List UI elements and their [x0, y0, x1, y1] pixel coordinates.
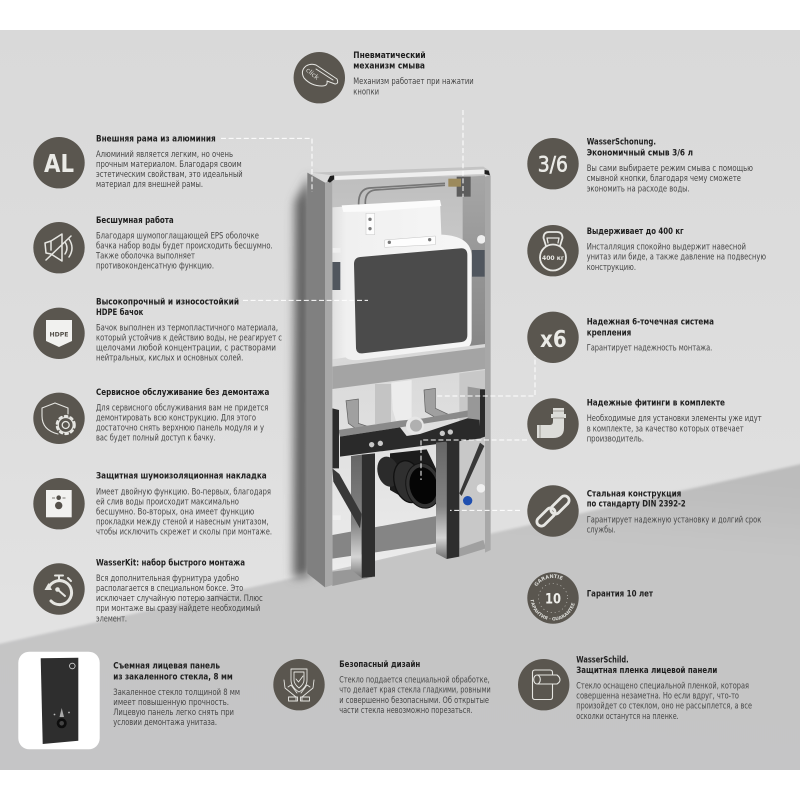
text block: Лицевую панель легко снять при: [113, 708, 234, 718]
heading: крепления: [587, 328, 631, 338]
heading: Бесшумная работа: [96, 215, 174, 226]
left leg black: [362, 453, 375, 578]
text block: осколки останутся на пленке.: [576, 712, 679, 722]
heading: [113, 662, 233, 682]
text block: [587, 243, 766, 273]
text block: [353, 77, 474, 97]
heading: Защитная шумоизоляционная накладка: [96, 471, 267, 481]
icon: HDPE shield: [33, 308, 85, 359]
icon: muted speaker: [33, 222, 85, 273]
shelf top lip: [332, 344, 485, 367]
top cap: [311, 167, 491, 181]
icon: x6: [527, 312, 579, 363]
text block: Имеет двойную функцию. Во-первых, благодаря: [96, 487, 271, 497]
left rail front: [325, 181, 332, 587]
left diagonal brace: [332, 468, 362, 528]
pipes: [359, 183, 445, 205]
back wall of frame: [332, 175, 485, 570]
text block: конструкцию.: [587, 263, 636, 273]
elbow flange: [406, 417, 424, 435]
heading: Высокопрочный и износостойкий: [96, 297, 239, 307]
icon: pad: [33, 478, 85, 529]
text block: [96, 403, 268, 444]
right post: [468, 387, 485, 438]
text block: Вся дополнительная фурнитура удобно: [96, 574, 239, 584]
heading: [587, 489, 686, 510]
text block: [95, 231, 273, 272]
text block: бачка набор воды будет происходить бесшумно.: [96, 241, 273, 251]
icon: AL: [33, 137, 85, 188]
panel: pneumatic flush: [294, 51, 474, 103]
text block: материал для внешней рамы.: [96, 180, 203, 190]
icon: 3/6: 3/6: [538, 152, 568, 176]
side clips: [332, 250, 485, 290]
text block: и совершенно безопасными. Об открытые: [339, 696, 489, 706]
beam bolts: [369, 429, 453, 447]
right leg black: [447, 439, 459, 559]
text block: [339, 676, 491, 716]
text block: достаточно снять верхнюю панель модуля и у: [96, 424, 264, 434]
text block: [587, 164, 753, 194]
black corner left: [327, 175, 334, 183]
text block: прокладки между стеной и навесным унитазом,: [96, 518, 269, 528]
panel: fittings: [527, 398, 762, 450]
brass fitting: [448, 177, 471, 197]
icon: warranty badge: 10: [545, 592, 561, 608]
text block: Инсталляция спокойно выдержит навесной: [587, 243, 746, 253]
text block: располагается в специальном боксе. Это: [96, 584, 243, 594]
heading: WasserSchild.: [576, 655, 629, 665]
icon: chain: [527, 485, 579, 537]
text block: Также оболочка выполняет: [95, 251, 195, 261]
panel: 400 kg load: [527, 225, 766, 276]
text block: имеет повышенную прочность.: [113, 698, 229, 708]
text block: при монтаже вы сразу найдете необходимый: [96, 604, 260, 614]
text block: Вы сами выбираете режим смыва с помощью: [587, 164, 753, 174]
text block: [96, 487, 272, 538]
text block: прочным материалом. Благодаря своим: [96, 160, 242, 170]
top cap highlight: [335, 169, 484, 180]
back shadow of drain pipe: [375, 384, 391, 424]
text block: Стекло поддается специальной обработке,: [339, 676, 490, 686]
panel: six-point fixing: [527, 312, 714, 363]
panel: WasserSchonung: [527, 138, 753, 194]
text block: Благодаря шумопоглащающей EPS оболочке: [96, 231, 259, 241]
heading: [576, 655, 717, 676]
heading: HDPE бачок: [96, 307, 143, 318]
icon: elbow fitting: [527, 398, 579, 450]
left rail side: [307, 173, 325, 587]
drain pipe: [391, 380, 412, 423]
icon: film roll: [518, 659, 569, 710]
blue water connector: [463, 496, 472, 505]
text block: ей слив воды происходит максимально: [96, 497, 239, 507]
panel: aluminium frame: [33, 134, 243, 190]
heading: Экономичный смыв 3/6 л: [587, 148, 693, 158]
text block: чтобы исключить скрежет и сколы при монтаже.: [96, 528, 272, 538]
icon: HDPE shield: HDPE: [50, 330, 68, 338]
panel: removable glass front: [18, 652, 240, 749]
drain socket: [374, 449, 445, 511]
left foot: [332, 569, 375, 586]
icon: AL: AL: [44, 149, 74, 178]
text block: бесшумно. Во-вторых, она имеет функцию: [96, 507, 254, 517]
product card: [18, 652, 100, 749]
heading: Надежные фитинги в комплекте: [587, 399, 725, 409]
frame shadow: [293, 175, 310, 578]
text block: противоконденсатную функцию.: [96, 262, 214, 272]
text block: элемент.: [96, 614, 127, 624]
text block: [587, 414, 762, 444]
icon: x6: x6: [540, 327, 567, 353]
text block: исключает случайную потерю запчасти. Плюс: [96, 594, 263, 604]
heading: Надежная 6-точечная система: [587, 318, 714, 328]
text block: части стекла невозможно порезаться.: [339, 706, 472, 716]
text block: экономить на расходе воды.: [587, 184, 690, 194]
icon: click hand: [294, 52, 345, 103]
bracket screws: [368, 218, 431, 244]
left black post: [332, 408, 339, 468]
text block: [587, 515, 761, 535]
heading: Пневматический: [353, 51, 426, 61]
icon: warranty badge: ГАРАНТИЯ · GUARANTEE: [530, 600, 575, 620]
text block: [576, 682, 752, 722]
text block: производитель.: [587, 434, 644, 444]
panel: 10 year warranty: [527, 572, 654, 624]
black corner right: [485, 170, 490, 175]
text block: нейтральных, кислых и основных солей.: [96, 354, 243, 364]
heading: механизм смыва: [353, 61, 425, 71]
icon: click hand: click: [304, 66, 321, 82]
panel: safe design: [273, 659, 491, 716]
icon: hands and shield: [273, 659, 325, 710]
panel: HDPE tank: [33, 297, 282, 364]
text block: щелочами любой концентрации, с растворами: [96, 343, 276, 353]
text block: демонтировать всю конструкцию. Для этого: [96, 414, 256, 424]
icon: stopwatch: [33, 563, 85, 615]
tank brackets: [366, 213, 435, 247]
panel: WasserKit: [33, 557, 263, 624]
heading: из закаленного стекла, 8 мм: [113, 672, 233, 682]
connector lines: [221, 110, 535, 510]
text block: условии демонтажа унитаза.: [113, 718, 217, 728]
icon: kettlebell: 400 кг: [542, 254, 565, 262]
tank body: [332, 200, 472, 360]
background floor: [0, 462, 800, 780]
right diagonal brace: [459, 443, 484, 496]
heading: [353, 51, 426, 71]
text block: смывной кнопки, благодаря чему сможете: [587, 174, 741, 184]
panel: silent operation: [33, 215, 273, 273]
icon: kettlebell: [527, 225, 579, 276]
text block: в комплекте, за качество которых отвечает: [587, 424, 744, 434]
chrome top of beam: [338, 408, 479, 437]
heading: Выдерживает до 400 кг: [587, 227, 684, 237]
icon: warranty badge: GARANTIE: [534, 574, 564, 586]
text block: кнопки: [353, 87, 379, 97]
left leg chrome: [351, 455, 362, 579]
panel: service without dismantling: [33, 387, 269, 444]
black cross beam: [340, 414, 481, 457]
grey tank shelf: [332, 346, 485, 389]
panel: steel structure: [527, 485, 761, 537]
text block: [96, 323, 282, 364]
product photo: installation frame: [293, 167, 491, 587]
white knobs: [333, 235, 486, 520]
text block: Алюминий является легким, но очень: [96, 150, 233, 160]
right leg chrome: [436, 442, 447, 559]
chrome mounting brackets: [346, 388, 457, 432]
text block: Стекло оснащено специальной пленкой, которая: [576, 682, 749, 692]
text block: совершенна незаметна. Но если вдруг, что-то: [576, 692, 739, 702]
bottom page margin: [0, 770, 800, 800]
heading: Внешняя рама из алюминия: [96, 134, 216, 144]
text block: службы.: [587, 525, 615, 535]
heading: [96, 297, 239, 318]
heading: по стандарту DIN 2392-2: [587, 500, 686, 510]
text block: который устойчив к действию воды, не реагирует с: [96, 333, 282, 343]
text block: эстетическим свойствам, это идеальный: [96, 170, 243, 180]
heading: WasserKit: набор быстрого монтажа: [96, 557, 245, 568]
text block: вас будет полный доступ к бачку.: [96, 434, 216, 444]
heading: Съемная лицевая панель: [113, 662, 220, 672]
heading: Безопасный дизайн: [339, 660, 420, 670]
lower cross strip: [332, 516, 437, 559]
text block: Механизм работает при нажатии: [353, 77, 474, 87]
text block: [96, 574, 263, 624]
right inner wall: [463, 176, 485, 350]
icon: warranty badge: [527, 572, 579, 624]
right rail: [485, 175, 491, 553]
text block: Для сервисного обслуживания вам не придется: [96, 403, 268, 413]
right foot: [459, 540, 486, 557]
lower right wall: [459, 370, 485, 547]
text block: [113, 688, 240, 728]
text block: Бачок выполнен из термопластичного материала,: [96, 323, 278, 333]
text block: Гарантирует надежность монтажа.: [587, 344, 712, 354]
text block: [96, 150, 243, 190]
text block: что делает края стекла гладкими, ровными: [339, 686, 491, 696]
panel: protective pad: [33, 471, 272, 538]
text block: Закаленное стекло толщиной 8 мм: [113, 688, 240, 698]
tank front panel: [354, 248, 467, 353]
panel: WasserSchild: [518, 655, 752, 722]
icon: 3/6: [527, 138, 579, 189]
tank lip: [342, 200, 441, 212]
heading: Защитная пленка лицевой панели: [576, 666, 717, 676]
heading: [587, 318, 714, 338]
heading: Сервисное обслуживание без демонтажа: [96, 387, 269, 398]
heading: [587, 138, 693, 158]
icon: shield with gear: [33, 393, 85, 444]
heading: Стальная конструкция: [587, 489, 681, 499]
heading: Гарантия 10 лет: [587, 590, 654, 600]
heading: WasserSchonung.: [587, 138, 656, 148]
